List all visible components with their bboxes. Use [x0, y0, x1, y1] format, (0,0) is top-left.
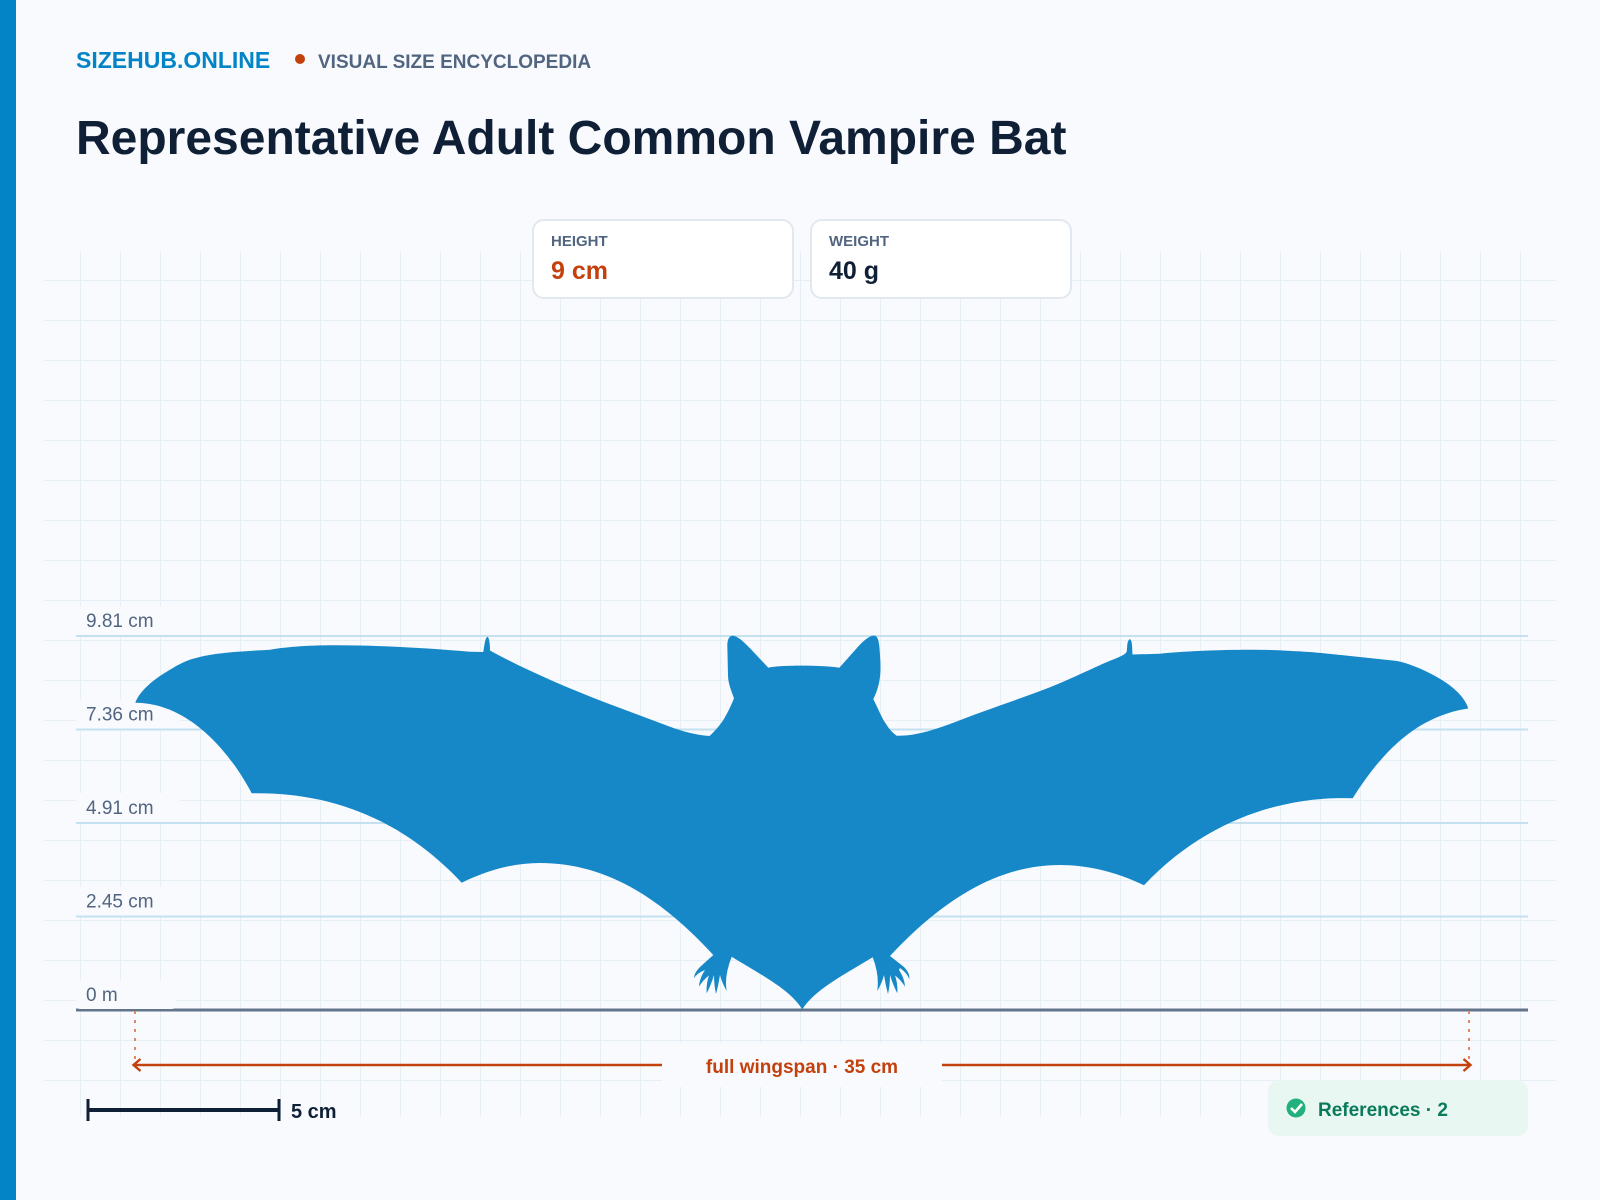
wingspan dimension — [133, 1011, 1471, 1087]
header: brand line — [76, 47, 591, 73]
bat silhouette — [135, 636, 1468, 1009]
card: height — [533, 220, 793, 298]
label background — [662, 1043, 942, 1087]
label: 7.36 cm: 7.36 cm — [86, 704, 154, 726]
dotted guides — [135, 1011, 1469, 1060]
card: height: 9 cm — [551, 257, 608, 285]
card: weight: 40 g — [829, 257, 879, 285]
label: 0 m — [76, 980, 176, 1009]
right arrow — [942, 1059, 1471, 1071]
height reference lines — [76, 635, 1528, 918]
label: 0 m: 0 m — [86, 985, 118, 1006]
label: 7.36 cm — [76, 700, 180, 728]
background grid — [44, 252, 1556, 1116]
wingspan label: full wingspan · 35 cm — [706, 1057, 898, 1078]
ground line — [76, 1008, 1528, 1012]
accent bar — [0, 0, 16, 1200]
title: Representative Adult Common Vampire Bat — [76, 112, 1066, 165]
references badge: References · 2 — [1318, 1100, 1448, 1121]
scale bar — [88, 1099, 337, 1123]
label: 4.91 cm: 4.91 cm — [86, 798, 154, 819]
card: weight — [811, 220, 1071, 298]
separator dot — [295, 54, 305, 64]
scale bar: 5 cm — [291, 1101, 337, 1123]
label: 9.81 cm: 9.81 cm — [86, 611, 154, 632]
references badge — [1268, 1080, 1528, 1136]
tagline: VISUAL SIZE ENCYCLOPEDIA — [318, 52, 591, 73]
icon: check — [1286, 1098, 1306, 1118]
card: height: HEIGHT — [551, 233, 608, 250]
label: 2.45 cm: 2.45 cm — [86, 892, 154, 912]
left arrow — [133, 1059, 662, 1071]
brand name: SIZEHUB.ONLINE — [76, 47, 270, 73]
label: 4.91 cm — [76, 793, 180, 822]
card: weight: WEIGHT — [829, 233, 889, 250]
label: 2.45 cm — [76, 886, 180, 916]
label: 9.81 cm — [76, 606, 180, 635]
